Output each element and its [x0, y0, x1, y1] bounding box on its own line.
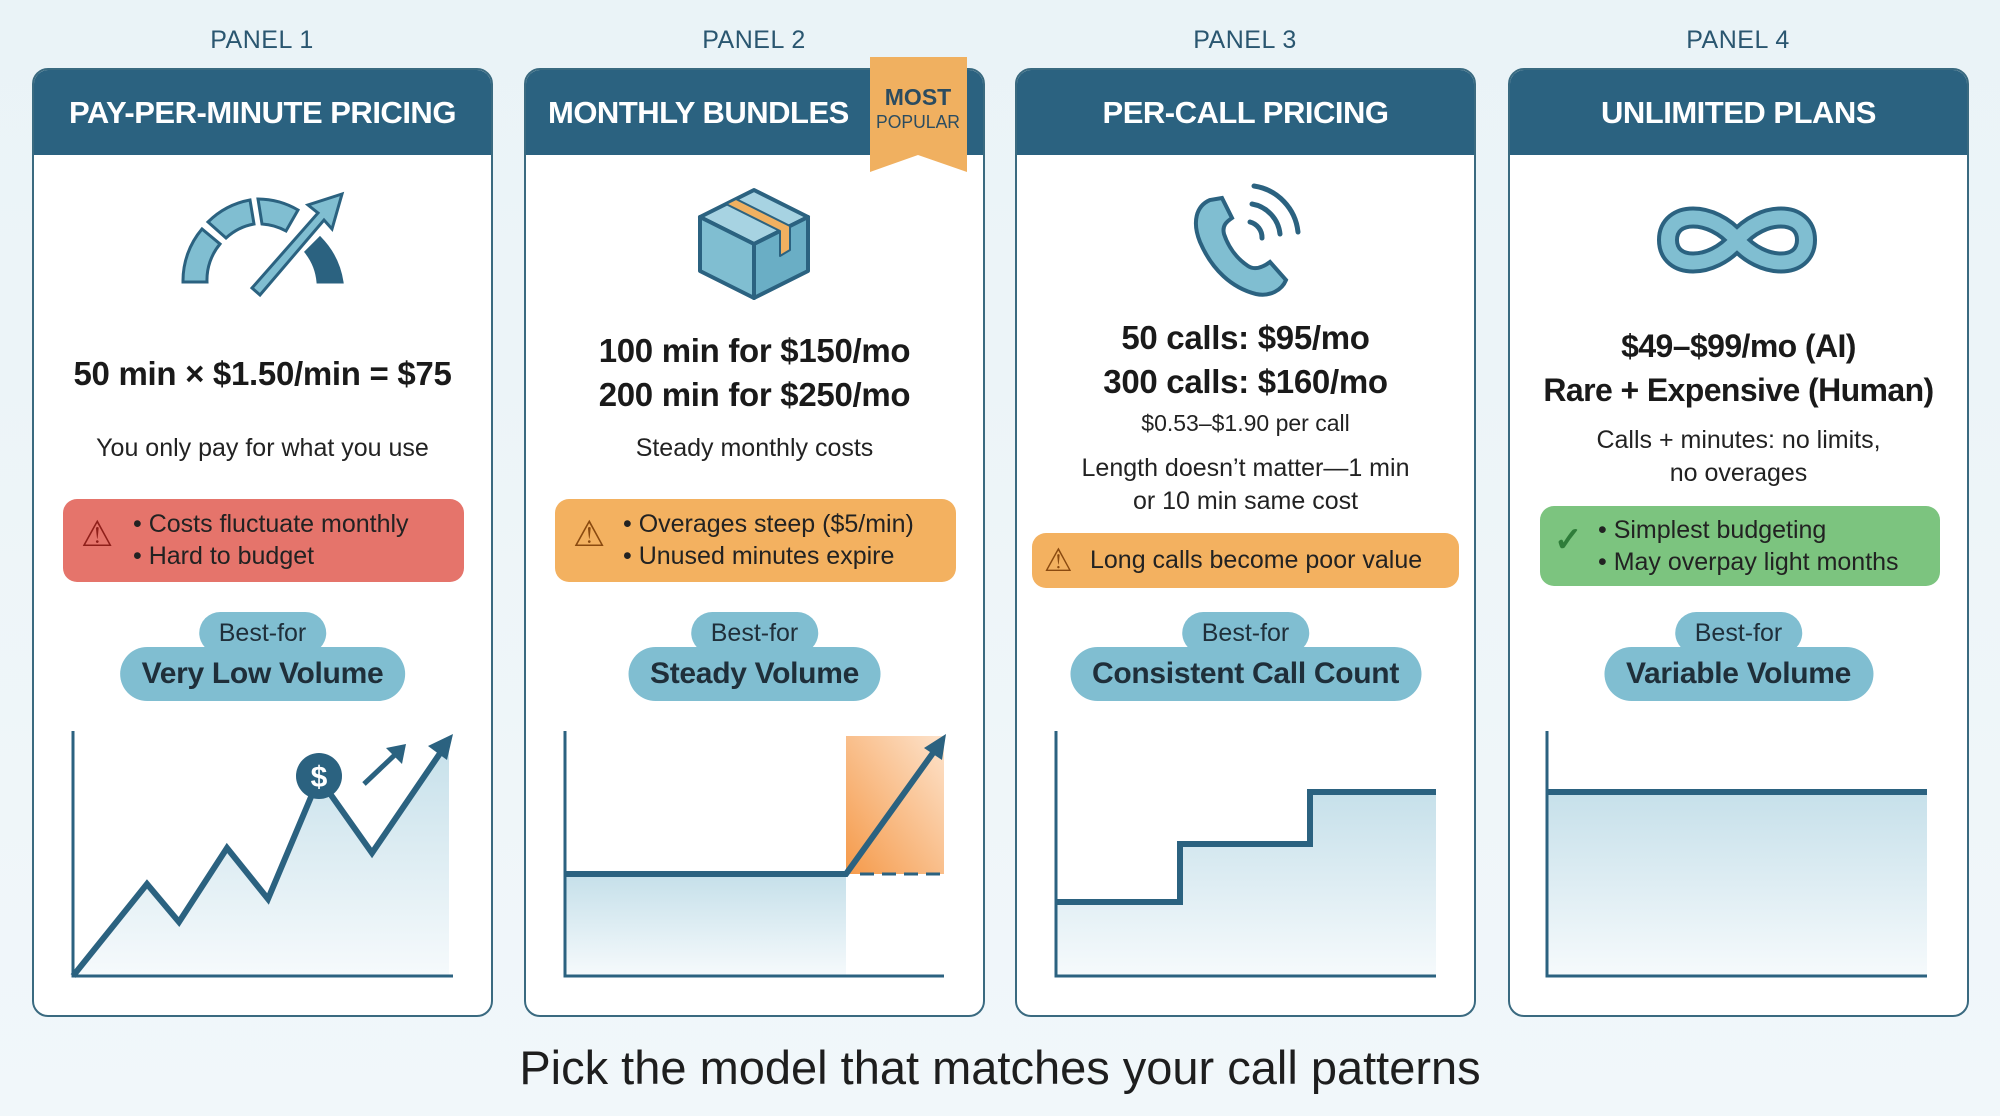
best-for value [120, 647, 405, 701]
warning box: • Costs fluctuate monthly [133, 510, 409, 538]
prices: 300 calls: $160/mo [1103, 363, 1388, 400]
subtext: Calls + minutes: no limits, [1596, 426, 1881, 454]
benefit box [1540, 506, 1940, 586]
best-for value: Variable Volume [1626, 657, 1851, 690]
prices [599, 332, 910, 413]
best-for tag [199, 612, 326, 654]
subtext: You only pay for what you use [96, 434, 429, 462]
length note: or 10 min same cost [1133, 487, 1358, 515]
per-call range: $0.53–$1.90 per call [1141, 410, 1350, 436]
benefit box: ✓ [1554, 521, 1582, 559]
panel: unlimited [1508, 68, 1969, 1017]
panel: monthly bundles [524, 68, 985, 1017]
chart: panel 1 zigzag [73, 731, 453, 976]
ribbon: most popular: POPULAR [876, 112, 960, 132]
prices [1543, 328, 1934, 408]
warning box [63, 499, 464, 582]
best-for value [628, 647, 881, 701]
heading [526, 70, 983, 155]
price formula: 50 min × $1.50/min = $75 [73, 355, 452, 392]
prices [1103, 319, 1388, 400]
heading [1017, 70, 1474, 155]
panel label 4: PANEL 4 [1686, 26, 1790, 54]
chart: panel 2 flat with overage [565, 731, 946, 976]
subtext [1596, 426, 1881, 487]
chart: panel 3 steps [1056, 731, 1436, 976]
warning box [1032, 533, 1459, 588]
warning box: ⚠ [1044, 541, 1073, 579]
heading: PAY-PER-MINUTE PRICING [69, 95, 456, 130]
best-for tag: Best-for [1202, 619, 1289, 647]
best-for value [1070, 647, 1421, 701]
icon: phone [1196, 186, 1298, 295]
prices: Rare + Expensive (Human) [1543, 372, 1934, 408]
panel label 1: PANEL 1 [210, 26, 314, 54]
icon: gauge [183, 194, 342, 295]
warning box [555, 499, 956, 582]
chart: panel 1 zigzag: $ [311, 761, 328, 794]
ribbon: most popular [870, 57, 967, 172]
heading: PER-CALL PRICING [1103, 95, 1388, 130]
best-for value: Steady Volume [650, 657, 859, 690]
best-for value: Very Low Volume [142, 657, 383, 690]
prices: 100 min for $150/mo [599, 332, 910, 369]
chart: panel 4 flat [1547, 731, 1927, 976]
best-for value: Consistent Call Count [1092, 657, 1399, 690]
prices: 200 min for $250/mo [599, 376, 910, 413]
icon: box [700, 190, 808, 298]
warning box: ⚠ [81, 514, 113, 555]
length note [1082, 454, 1409, 515]
subtext: no overages [1670, 459, 1807, 487]
warning box: • Unused minutes expire [623, 542, 894, 570]
panel: pay-per-minute [32, 68, 493, 1017]
heading [34, 70, 491, 155]
panel label 3: PANEL 3 [1193, 26, 1297, 54]
best-for tag [1182, 612, 1309, 654]
prices: $49–$99/mo (AI) [1621, 328, 1856, 364]
warning box: Long calls become poor value [1090, 546, 1422, 574]
benefit box: • Simplest budgeting [1598, 516, 1826, 544]
subtext: Steady monthly costs [636, 434, 873, 462]
best-for tag [691, 612, 818, 654]
heading [1510, 70, 1967, 155]
best-for tag: Best-for [219, 619, 306, 647]
length note: Length doesn’t matter—1 min [1082, 454, 1409, 482]
warning box: • Hard to budget [133, 542, 314, 570]
warning box: • Overages steep ($5/min) [623, 510, 914, 538]
ribbon: most popular: MOST [885, 84, 951, 110]
heading: UNLIMITED PLANS [1601, 95, 1876, 130]
prices: 50 calls: $95/mo [1121, 319, 1370, 356]
best-for value [1604, 647, 1873, 701]
best-for tag [1675, 612, 1802, 654]
caption: Pick the model that matches your call patterns [519, 1041, 1481, 1094]
icon: infinity [1668, 218, 1806, 262]
benefit box: • May overpay light months [1598, 548, 1899, 576]
warning box: ⚠ [573, 514, 605, 555]
panel label 2: PANEL 2 [702, 26, 806, 54]
panel: per-call [1015, 68, 1476, 1017]
heading: MONTHLY BUNDLES [548, 95, 849, 130]
best-for tag: Best-for [1695, 619, 1782, 647]
best-for tag: Best-for [711, 619, 798, 647]
